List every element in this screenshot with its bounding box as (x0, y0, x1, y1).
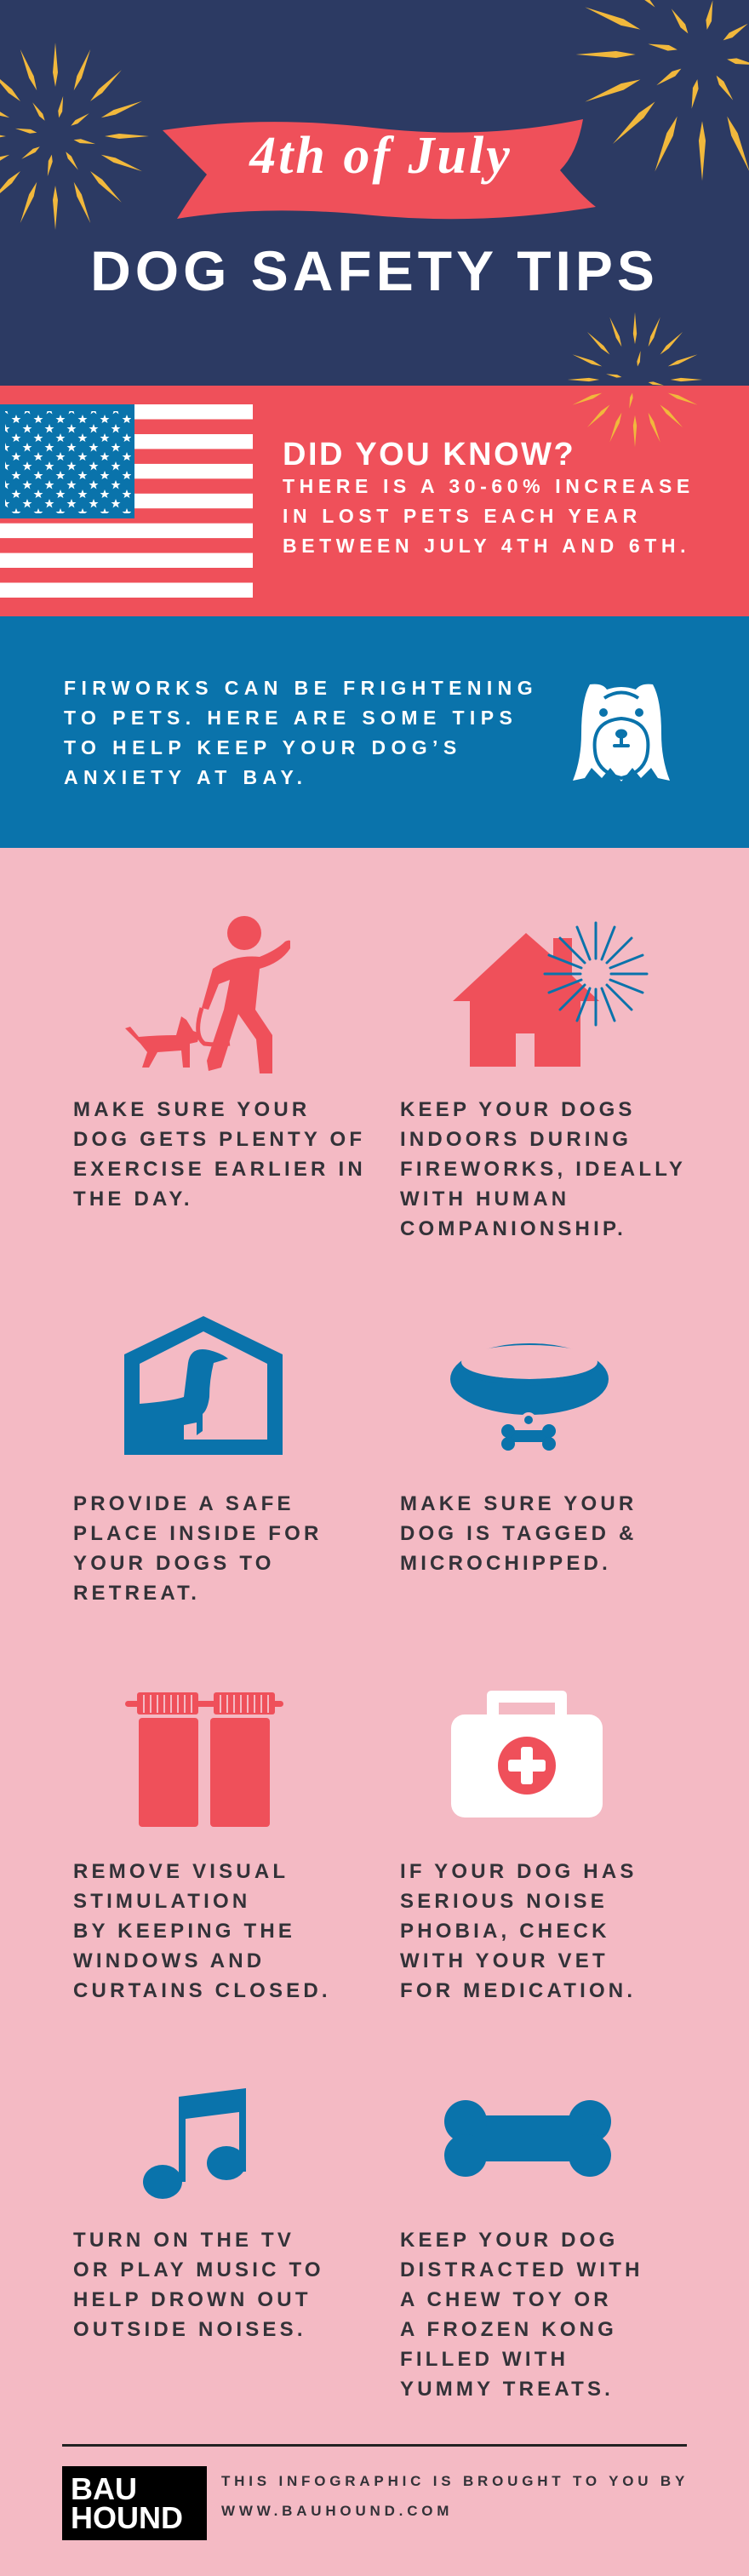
intro text: TO HELP KEEP YOUR DOG’S (64, 736, 462, 758)
heading: did you know: DID YOU KNOW? (283, 437, 575, 472)
panel: did you know (0, 386, 749, 616)
icon: american flag (0, 404, 253, 598)
tip: safe place: RETREAT. (73, 1582, 200, 1605)
icon: music note (143, 2088, 246, 2199)
tip: exercise: THE DAY. (73, 1188, 193, 1211)
tip: vet: IF YOUR DOG HAS (400, 1860, 638, 1883)
tip: visual stimulation: STIMULATION (73, 1890, 250, 1913)
stat text: BETWEEN JULY 4TH AND 6TH. (283, 535, 690, 557)
banner ribbon (163, 119, 596, 220)
tip: visual stimulation: REMOVE VISUAL (73, 1860, 289, 1883)
tip: chew toy: FILLED WITH (400, 2348, 569, 2371)
tip: tagged (400, 1492, 638, 1575)
tip: indoors: KEEP YOUR DOGS (400, 1098, 636, 1121)
icon: dog face (573, 684, 670, 781)
intro text: FIRWORKS CAN BE FRIGHTENING (64, 677, 538, 699)
icon: house with firework (453, 921, 649, 1067)
logo: bau hound: BAU (71, 2471, 137, 2506)
tip: exercise: DOG GETS PLENTY OF (73, 1128, 365, 1151)
tip: visual stimulation (73, 1860, 331, 2002)
title: dog safety tips: DOG SAFETY TIPS (90, 239, 659, 302)
tip: tagged: DOG IS TAGGED & (400, 1522, 638, 1545)
icon: curtains (125, 1692, 283, 1827)
tip: safe place: YOUR DOGS TO (73, 1552, 275, 1575)
tip: exercise (73, 1098, 366, 1211)
tip: vet: SERIOUS NOISE (400, 1890, 608, 1913)
header panel (0, 0, 749, 386)
logo: bau hound (62, 2466, 207, 2540)
tip: indoors (400, 1098, 686, 1240)
tip: chew toy: DISTRACTED WITH (400, 2258, 643, 2281)
tip: vet: WITH YOUR VET (400, 1949, 609, 1972)
tip: chew toy: KEEP YOUR DOG (400, 2229, 618, 2252)
title: 4th of July: 4th of July (249, 127, 512, 185)
tip: visual stimulation: WINDOWS AND (73, 1949, 265, 1972)
icon: collar with bone tag (450, 1343, 609, 1451)
tip: safe place (73, 1492, 323, 1605)
footer credit text (221, 2473, 689, 2519)
tip: tagged: MAKE SURE YOUR (400, 1492, 637, 1515)
icon: bone (444, 2100, 611, 2177)
fireworks decorations (0, 0, 749, 230)
tip: vet: FOR MEDICATION. (400, 1979, 636, 2002)
tip: vet (400, 1860, 638, 2002)
tip: music: OUTSIDE NOISES. (73, 2318, 306, 2341)
small firework (568, 312, 702, 447)
tip: safe place: PROVIDE A SAFE (73, 1492, 294, 1515)
footer credit text: WWW.BAUHOUND.COM (221, 2503, 453, 2519)
intro text: TO PETS. HERE ARE SOME TIPS (64, 707, 517, 729)
tip: chew toy: A CHEW TOY OR (400, 2288, 612, 2311)
tip: chew toy (400, 2229, 643, 2401)
tip: music: HELP DROWN OUT (73, 2288, 312, 2311)
tip: indoors: WITH HUMAN (400, 1188, 569, 1211)
tip: chew toy: A FROZEN KONG (400, 2318, 617, 2341)
logo: bau hound: HOUND (71, 2500, 183, 2535)
tip: exercise: MAKE SURE YOUR (73, 1098, 310, 1121)
tip: indoors: COMPANIONSHIP. (400, 1217, 626, 1240)
stat text: THERE IS A 30-60% INCREASE (283, 475, 695, 497)
footer credit text: THIS INFOGRAPHIC IS BROUGHT TO YOU BY (221, 2473, 689, 2489)
stat text: IN LOST PETS EACH YEAR (283, 505, 642, 527)
tip: chew toy: YUMMY TREATS. (400, 2378, 614, 2401)
tip: music (73, 2229, 324, 2341)
tip: music: TURN ON THE TV (73, 2229, 294, 2252)
tip: indoors: INDOORS DURING (400, 1128, 632, 1151)
tip: vet: PHOBIA, CHECK (400, 1920, 610, 1943)
icon: dog walker (125, 916, 290, 1073)
icon: first aid kit (451, 1691, 603, 1818)
stat text (283, 475, 695, 557)
footer (62, 2444, 689, 2540)
panel: intro (0, 616, 749, 848)
intro text (64, 677, 538, 788)
tip: music: OR PLAY MUSIC TO (73, 2258, 324, 2281)
tip: indoors: FIREWORKS, IDEALLY (400, 1158, 686, 1181)
tip: exercise: EXERCISE EARLIER IN (73, 1158, 366, 1181)
tip: safe place: PLACE INSIDE FOR (73, 1522, 323, 1545)
tip: tagged: MICROCHIPPED. (400, 1552, 611, 1575)
tip: visual stimulation: CURTAINS CLOSED. (73, 1979, 331, 2002)
tip: visual stimulation: BY KEEPING THE (73, 1920, 295, 1943)
intro text: ANXIETY AT BAY. (64, 766, 307, 788)
icon: dog house (124, 1316, 283, 1455)
panel: tips (73, 916, 686, 2401)
